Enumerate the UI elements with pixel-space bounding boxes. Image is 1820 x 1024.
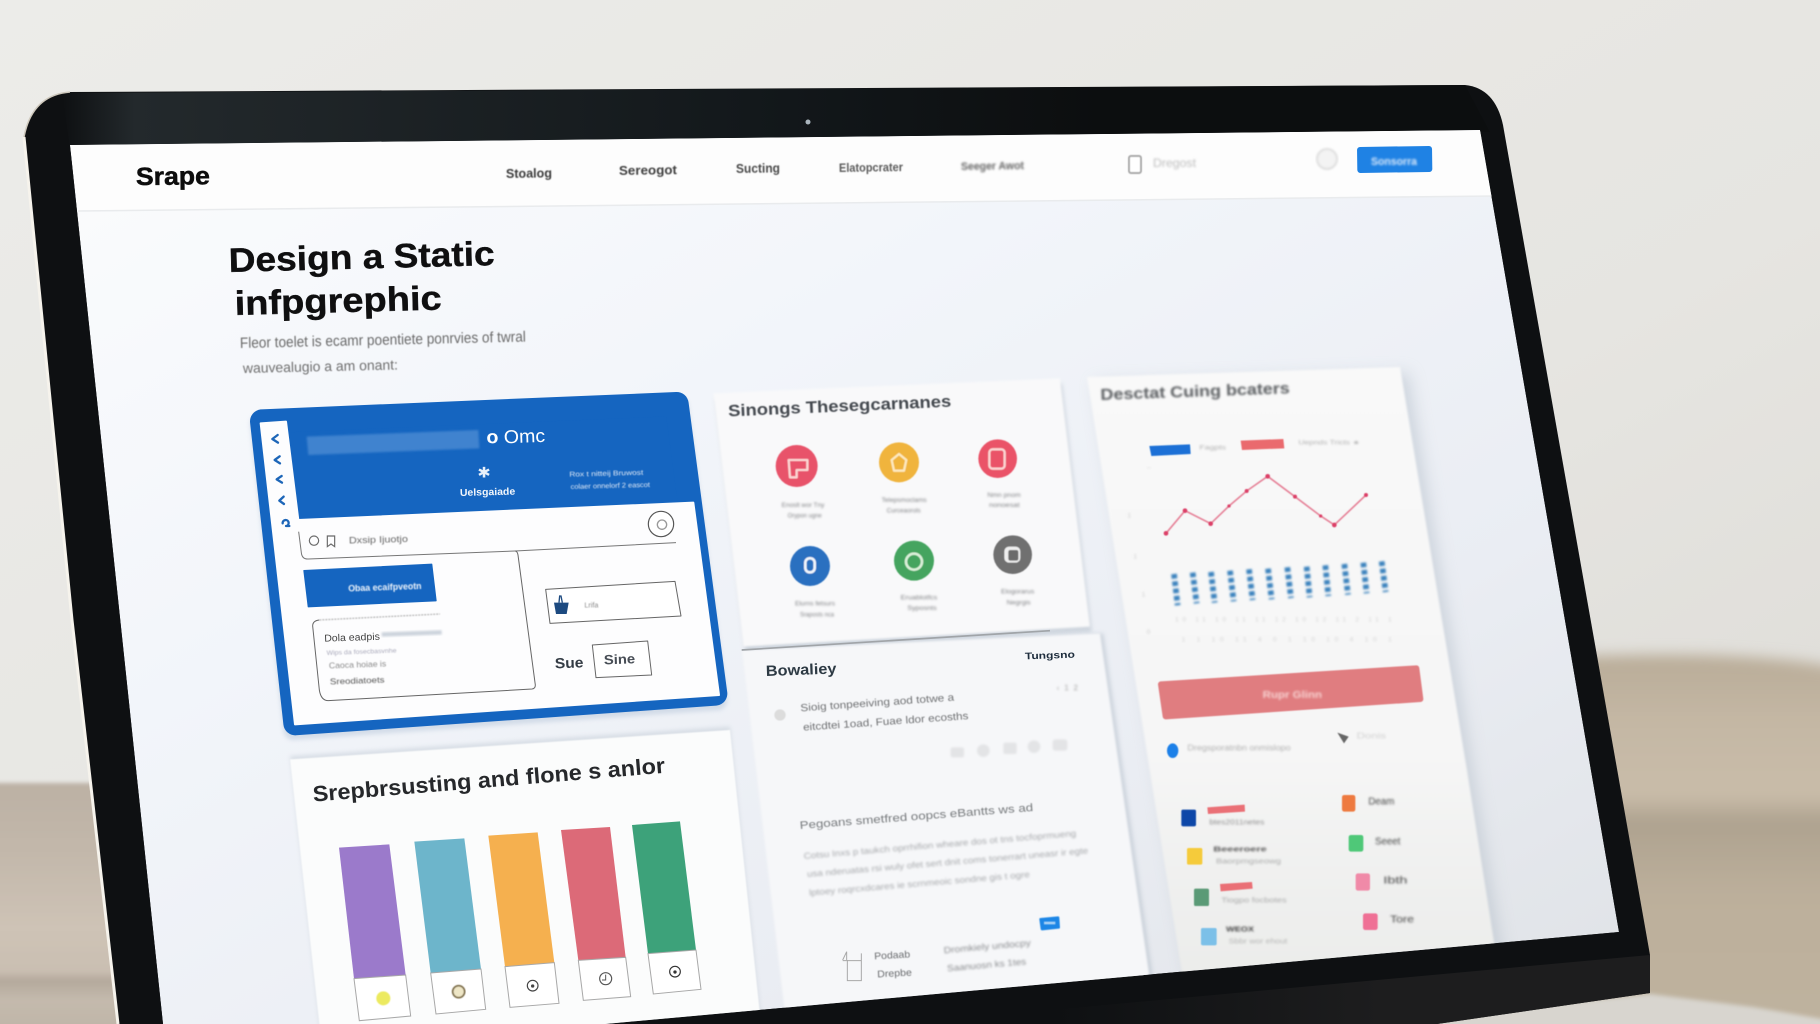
legend list: btes2011netes [1209,817,1265,826]
panel: icon grid [713,378,1092,652]
legend list: Tore [1390,915,1415,926]
card note: Rox t nitteij Bruwost [569,470,643,479]
sidebar icons [272,435,289,526]
panel: text notes [742,631,1157,1024]
dot matrix [1174,561,1386,605]
icon captions: Negrgis [1007,600,1031,607]
page heading: infpgrephic [234,280,442,323]
paragraph: Cotsu Inxs p taukch oprrhifion wheare dos ot tns tocfoprmueng [803,828,1077,861]
legend [1149,439,1360,456]
details box: Dola eadpis [324,632,380,645]
nav: Stoalog: Stoalog [506,165,552,181]
icon captions: Nmn pnom [987,492,1021,499]
paragraph: lptoey roqrcxdcares ie scrnmeoic sondne gis t ogre [809,869,1030,898]
details box [313,551,535,701]
legend list: Ibth [1383,875,1407,886]
legend list: Sbbr wor ehout [1229,936,1287,945]
logo: Srape [136,162,210,191]
navigation bar [70,130,1497,211]
icon captions: Orypon ugne [788,513,822,520]
wooden table right [1500,655,1820,1024]
tag: Tungsno [1025,650,1075,662]
icon captions: Syposnts [907,605,937,612]
legend: Fagpts [1199,445,1226,451]
icon: blue headset [790,546,830,586]
Sue label: Sue [555,655,584,672]
caption left [874,949,912,980]
caption left: Drepbe [877,968,912,980]
search row [299,511,676,559]
blurred header bar [307,430,479,455]
caption right [943,938,1032,973]
legend list: Tiogpo focbotes [1221,896,1287,905]
panel: chart [1088,368,1504,972]
card title [487,430,545,444]
input field: Lrifa [584,600,599,609]
bar: red [561,827,631,1000]
faint icon row [951,739,1067,757]
axis ticks: 1 [1142,592,1146,599]
legend list: Beeeroere [1213,845,1267,854]
pager: ‹ 1 2 [1057,684,1079,693]
icon: document outline [843,952,861,981]
icon captions: Elurns fetsurs [795,600,835,607]
legend list: Seeet [1375,836,1401,847]
bar: teal [414,838,486,1014]
note text [800,693,969,734]
bar: purple [339,844,411,1021]
icon captions [782,492,1034,618]
blue action button: Obaa ecaifpveotn [348,581,422,594]
page subheading: Fleor toelet is ecamr poentiete ponrvies of twral [240,329,526,352]
red button: Rupr Glinn [1263,690,1322,701]
page heading [228,235,495,323]
table highlight [1400,994,1820,1024]
red button [1161,668,1420,716]
chart contents [1100,380,1420,758]
faint value rows [1175,617,1392,644]
legend list: Deam [1368,797,1394,808]
bar: orange [488,832,559,1007]
icon: green badge [894,541,934,581]
axis ticks: 1 [1127,512,1131,519]
axis ticks: 0 [1147,629,1151,636]
icon: star badge: ✱ [477,465,491,481]
input field [546,581,681,623]
page subheading: wauvealugio a am onant: [242,356,398,376]
caption right: Saanuosn ks 1tes [947,956,1027,973]
nav: Sereogot: Sereogot [619,162,678,178]
section heading: Pegoans smetfred oopcs eBantts ws ad [799,802,1034,832]
status row: Dregsporatnbn onmislopo [1187,744,1291,753]
icon captions: nonoesat [989,502,1020,509]
sign-in button [1357,146,1432,173]
sign-in button: Sonsorra [1371,156,1418,168]
icon: red document [978,439,1017,478]
caption left: Podaab [874,949,910,962]
legend: Uepnds Tricts ★ [1298,440,1360,447]
line chart [1164,474,1368,536]
Sine button: Sine [604,651,635,667]
icon captions: Eruablotfcs [901,595,937,602]
nav: Seeger Awot: Seeger Awot [961,160,1024,173]
paragraph: usa nderuatas rsi wuly ofet sert dnit coms tonerrart uneasr ir egte [807,845,1089,879]
note text: Sioig tonpeeiving aod totwe a [800,693,955,714]
note text: eitcdtei 1oad, Fuae ldor ecosths [803,711,969,734]
status row [1167,732,1386,758]
icon captions: Elogorarus [1001,589,1034,596]
details box: Sreodiatoets [330,675,385,687]
camera [806,120,810,124]
axis ticks: 1 [1133,553,1137,560]
details box: Wips da fosecbasvnhe [327,649,397,657]
status row: Donis [1357,732,1386,741]
faint value rows: 1 1 10 11 4 0 1 10 10 4 10 1 [1182,637,1392,644]
page subheading [240,329,526,376]
panel title: Sinongs Thesegcarnanes [728,392,952,421]
bar: green [632,821,701,994]
legend list: Baorpmgseowg [1216,856,1281,865]
card label: Uelsgaiade [460,487,516,499]
nav: Elatopcrater: Elatopcrater [839,162,904,175]
caption right: Dromkiely undocpy [943,938,1032,955]
icon: profile circle [1317,149,1337,169]
page heading: Design a Static [228,235,495,280]
axis ticks: -- [1147,464,1151,471]
card title: Omc [503,425,545,447]
icon: document [1129,156,1141,173]
legend list: WEOX [1226,924,1254,933]
bullet [774,709,786,721]
panel: blue form card [260,404,719,730]
card title: o [486,426,499,447]
nav: Sucting: Sucting [736,160,780,176]
axis ticks [1127,464,1151,636]
icon: red chat [776,445,818,487]
icon: grey box [993,535,1032,574]
wooden table left [0,783,200,1024]
card note: colaer onnelorf 2 eascot [571,482,650,491]
panel: colour bars [290,727,762,1024]
blue action button [304,564,436,607]
white card interior [261,422,719,724]
legend list [1181,795,1415,945]
Sine button [592,641,652,678]
laptop screen [70,130,1619,1024]
icon captions: Sraposts nca [800,611,834,618]
card note [569,470,650,491]
blue chip [1041,918,1059,929]
icon captions: Telepsmoclams [882,497,927,504]
panel title: Bowaliey [766,661,837,680]
icon captions: Enoslt wor Tny [782,502,825,509]
paragraph [803,828,1089,898]
icon captions: Curceaorols [887,508,921,515]
icon: yellow home [879,442,919,482]
nav: Dregost: Dregost [1153,156,1197,170]
search row: Dxsip Ijuotjo [349,534,408,545]
details box: Caoca hoiae is [329,659,386,671]
panel title: Srepbrsusting and flone s anlor [312,753,666,807]
faint value rows: 10 11 10 11 11 12 10 12 11 2 11 1 [1175,617,1392,624]
chart title: Desctat Cuing bcaters [1100,380,1290,404]
